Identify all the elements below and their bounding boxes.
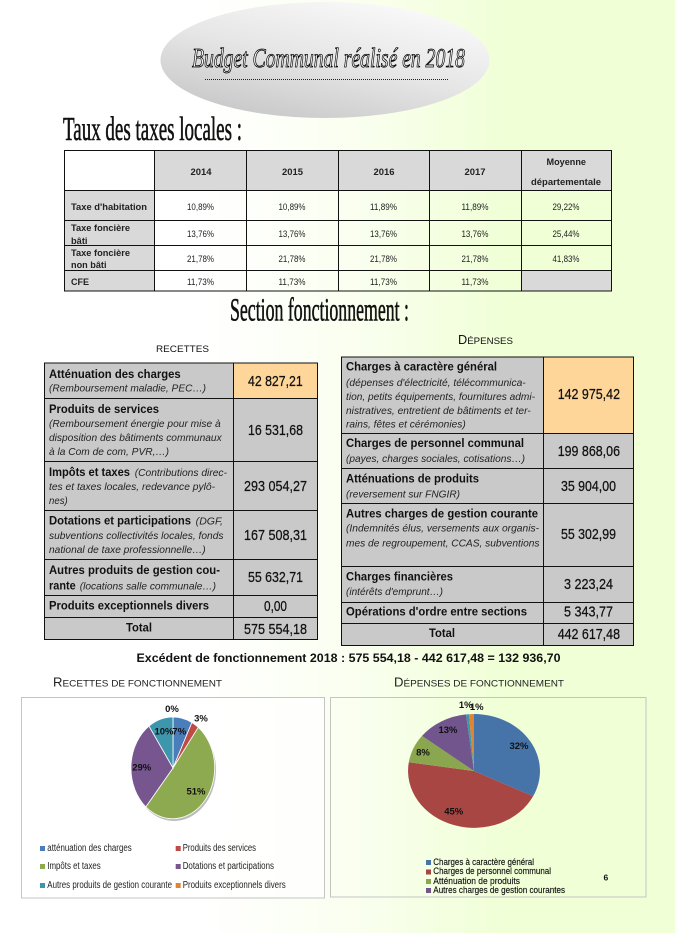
legend: recettes: atténuation des charges <box>47 843 132 854</box>
table: recettes: subventions collectivités locales, fonds <box>49 531 224 542</box>
chart: recettes de fonctionnement: 10% <box>154 727 174 738</box>
table: recettes: 293 054,27 <box>244 478 307 495</box>
table: dépenses: 199 868,06 <box>558 443 620 460</box>
table: taux des taxes: bâti <box>71 236 88 246</box>
table: dépenses: 142 975,42 <box>558 386 620 403</box>
table: recettes: disposition des bâtiments communaux <box>49 433 223 444</box>
heading: recettes: RECETTES <box>156 344 209 355</box>
table: taux des taxes: 11,73% <box>370 277 397 287</box>
table: taux des taxes: 10,89% <box>278 202 306 212</box>
chart: recettes de fonctionnement: 7% <box>172 727 187 738</box>
chart: recettes de fonctionnement <box>22 698 324 898</box>
table: taux des taxes: 21,78% <box>370 254 397 264</box>
table: recettes: nes) <box>49 496 68 507</box>
table: recettes: à la Com de com, PVR,…) <box>49 447 169 458</box>
table: dépenses: (dépenses d'électricité, télécommunica- <box>346 378 526 389</box>
legend: dépenses: Atténuation de produits <box>433 876 520 887</box>
table: dépenses: Charges de personnel communal <box>346 438 524 450</box>
table: taux des taxes: Taxe d'habitation <box>71 202 147 212</box>
table: taux des taxes: 13,76% <box>278 229 306 239</box>
table: taux des taxes: Taxe foncière <box>71 223 130 233</box>
table: dépenses: (payes, charges sociales, cotisations…) <box>346 454 525 465</box>
table: dépenses: nistratives, entretient de bâtiments et ter- <box>346 406 531 417</box>
table: taux des taxes: 21,78% <box>278 254 306 264</box>
table: taux des taxes: 11,73% <box>462 277 488 287</box>
table: dépenses: Atténuations de produits <box>346 474 479 486</box>
table: dépenses <box>342 357 634 646</box>
legend: recettes: Dotations et participations <box>183 861 274 872</box>
legend: dépenses <box>426 857 565 896</box>
table: taux des taxes: 2017 <box>464 167 486 177</box>
table: recettes: national de taxe professionnelle…) <box>49 545 206 556</box>
heading: dépenses: DÉPENSES <box>458 333 513 347</box>
table: taux des taxes: Taxe foncière <box>71 248 130 258</box>
heading: taux des taxes locales: Taux des taxes locales : <box>63 111 242 148</box>
table: taux des taxes: 41,83% <box>552 254 580 264</box>
table: dépenses: 5 343,77 <box>564 604 613 621</box>
table: dépenses: Opérations d'ordre entre sections <box>346 607 527 619</box>
table: recettes <box>44 363 318 640</box>
table: recettes: 0,00 <box>264 598 287 615</box>
table: dépenses: tion, petits équipements, fournitures admi- <box>346 392 536 403</box>
table: recettes: Dotations et participations <box>49 516 191 528</box>
table: dépenses: mes de regroupement, CCAS, subventions <box>346 539 540 550</box>
table: recettes: (Contributions direc- <box>135 468 228 479</box>
chart: recettes de fonctionnement: 3% <box>194 714 208 725</box>
table: dépenses: Autres charges de gestion courante <box>346 509 538 521</box>
table: dépenses: Charges à caractère général <box>346 362 497 374</box>
table: taux des taxes: Moyenne <box>546 157 586 167</box>
table: taux des taxes: 25,44% <box>552 229 580 239</box>
table: taux des taxes: départementale <box>531 177 601 187</box>
table: taux des taxes: 13,76% <box>370 229 397 239</box>
table: recettes: (Remboursement maladie, PEC…) <box>49 384 206 395</box>
table: recettes: Produits exceptionnels divers <box>49 601 209 613</box>
legend: dépenses: Charges de personnel communal <box>433 866 551 877</box>
table: taux des taxes: 21,78% <box>462 254 488 264</box>
table: recettes: (Remboursement énergie pour mise à <box>49 419 221 430</box>
chart: dépenses de fonctionnement <box>330 698 646 897</box>
table: taux des taxes: CFE <box>71 277 89 287</box>
heading: recettes de fonctionnement: RECETTES DE FONCTIONNEMENT <box>53 676 222 690</box>
table: taux des taxes: 21,78% <box>187 254 214 264</box>
table: taux des taxes: 13,76% <box>187 229 214 239</box>
table: taux des taxes: 2016 <box>374 167 394 177</box>
chart: dépenses de fonctionnement: 13% <box>438 725 458 736</box>
table: taux des taxes: 11,89% <box>370 202 397 212</box>
table: taux des taxes: 13,76% <box>462 229 488 239</box>
table: taux des taxes: 29,22% <box>552 202 580 212</box>
page number: 6 <box>604 873 608 883</box>
title banner: Budget Communal réalisé en 2018 <box>192 43 465 73</box>
table: taux des taxes <box>64 150 612 291</box>
table: recettes: 167 508,31 <box>244 527 307 544</box>
excédent de fonctionnement: Excédent de fonctionnement 2018 : 575 554,18 - 442 617,48 = 132 936,70 <box>136 653 560 665</box>
legend: dépenses: Charges à caractère général <box>433 857 534 868</box>
table: dépenses: 55 302,99 <box>561 526 616 543</box>
table: taux des taxes: 11,73% <box>278 277 306 287</box>
table: taux des taxes: 11,73% <box>187 277 214 287</box>
table: recettes: (locations salle communale…) <box>80 582 216 593</box>
table: recettes: rante <box>49 581 76 593</box>
legend: dépenses: Autres charges de gestion courantes <box>433 885 565 896</box>
chart: recettes de fonctionnement: 0% <box>165 704 179 715</box>
table: dépenses: (reversement sur FNGIR) <box>346 490 460 501</box>
legend: recettes: Autres produits de gestion courante <box>47 880 172 891</box>
table: dépenses: Charges financières <box>346 572 453 584</box>
table: recettes: 16 531,68 <box>248 422 303 439</box>
chart: recettes de fonctionnement: 51% <box>186 787 206 798</box>
table: taux des taxes: 10,89% <box>187 202 214 212</box>
chart: dépenses de fonctionnement: 45% <box>444 807 464 818</box>
table: dépenses: (intérêts d'emprunt…) <box>346 587 443 598</box>
legend: recettes: Impôts et taxes <box>47 861 101 872</box>
table: recettes: Impôts et taxes <box>49 467 130 479</box>
table: recettes: tes et taxes locales, redevance pylô- <box>49 482 216 493</box>
table: dépenses: 3 223,24 <box>564 576 613 593</box>
table: recettes: 42 827,21 <box>248 373 303 390</box>
table: recettes: Autres produits de gestion cou- <box>49 565 220 577</box>
table: taux des taxes: 2015 <box>282 167 303 177</box>
heading: dépenses de fonctionnement: DÉPENSES DE FONCTIONNEMENT <box>394 676 564 690</box>
table: recettes: (DGF, <box>196 517 223 528</box>
legend: recettes: Produits des services <box>183 843 256 854</box>
table: dépenses: 35 904,00 <box>561 478 616 495</box>
heading: section fonctionnement: Section fonctionnement : <box>230 292 409 328</box>
table: taux des taxes: 11,89% <box>462 202 488 212</box>
title banner <box>160 2 490 118</box>
table: dépenses: (Indemnités élus, versements aux organis- <box>346 524 540 535</box>
table: recettes: 575 554,18 <box>244 621 307 638</box>
legend: recettes <box>40 843 286 891</box>
chart: dépenses de fonctionnement: 1% <box>459 700 473 711</box>
table: dépenses: Total <box>429 628 455 640</box>
table: taux des taxes: non bâti <box>71 260 106 270</box>
chart: dépenses de fonctionnement: 8% <box>416 748 430 759</box>
chart: recettes de fonctionnement: 29% <box>132 763 152 774</box>
table: recettes: Atténuation des charges <box>49 369 181 381</box>
legend: recettes: Produits exceptionnels divers <box>183 880 286 891</box>
table: recettes: 55 632,71 <box>248 569 303 586</box>
table: dépenses: 442 617,48 <box>558 626 620 643</box>
chart: dépenses de fonctionnement: 1% <box>470 702 484 713</box>
chart: dépenses de fonctionnement: 32% <box>509 741 529 752</box>
table: taux des taxes: 2014 <box>190 167 212 177</box>
table: recettes: Total <box>126 623 152 635</box>
table: dépenses: rains, fêtes et cérémonies) <box>346 420 466 431</box>
table: recettes: Produits de services <box>49 404 159 416</box>
